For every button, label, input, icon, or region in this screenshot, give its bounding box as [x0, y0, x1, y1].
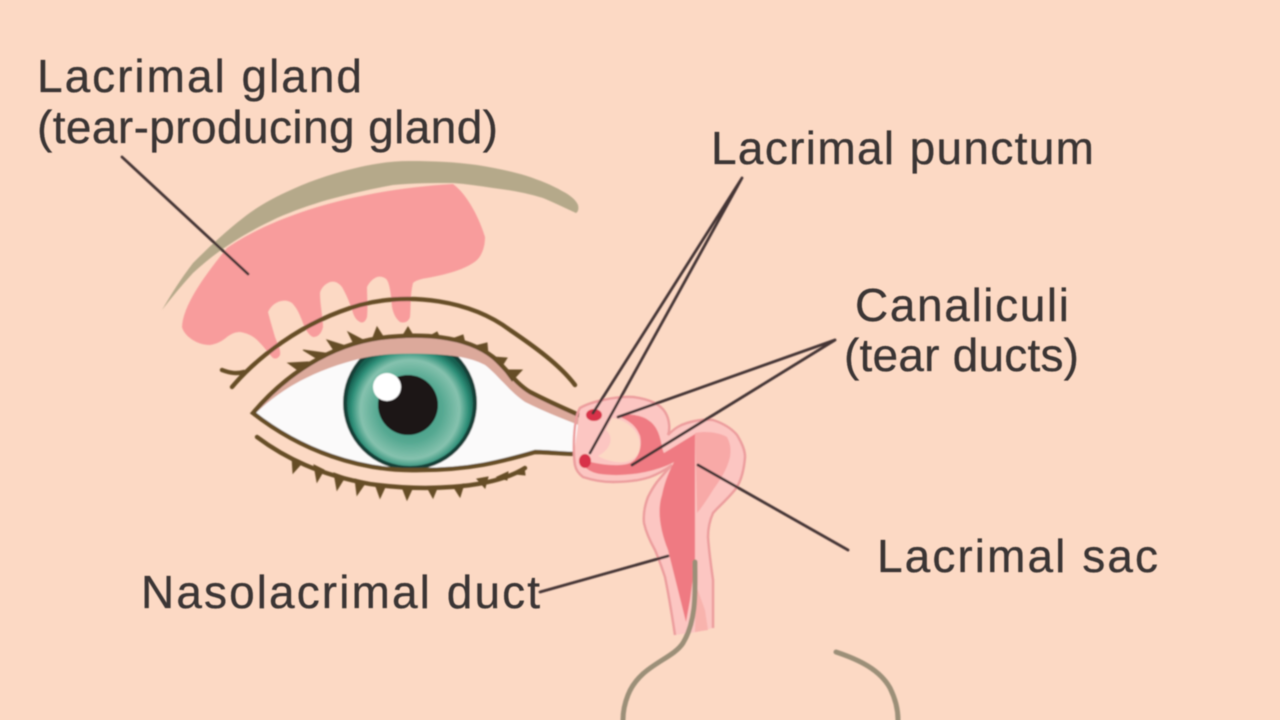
- caruncle: [590, 431, 611, 454]
- upper eyelid crease: [222, 299, 575, 387]
- eye outline: [253, 336, 612, 470]
- lacrimal gland: [182, 184, 485, 359]
- lower eyelashes: [292, 457, 525, 500]
- inner corner area: [598, 418, 640, 462]
- diagram: eye and tear system: [122, 157, 898, 720]
- highlight: [373, 373, 401, 401]
- leader lines: [122, 157, 848, 592]
- lower eyelid crease: [257, 437, 525, 488]
- iris: [345, 338, 475, 468]
- duct wall outline: [574, 397, 745, 635]
- label: nasolacrimal duct: Nasolacrimal duct: [141, 566, 540, 618]
- labels: [37, 50, 1158, 618]
- label: lacrimal punctum: Lacrimal punctum: [711, 122, 1094, 174]
- nose outline: [623, 562, 898, 720]
- lacrimal sac light side: [695, 432, 731, 513]
- label: lacrimal sac: Lacrimal sac: [877, 530, 1158, 582]
- lacrimal sac and duct wall fill: [573, 397, 745, 635]
- pupil: [378, 375, 438, 435]
- upper lid band: [256, 336, 597, 431]
- upper eyelashes: [288, 327, 522, 381]
- label: lacrimal gland: Lacrimal gland: [37, 50, 362, 102]
- label: tear ducts: (tear ducts): [844, 329, 1079, 381]
- lower duct light side: [695, 585, 708, 632]
- label: tear-producing gland: (tear-producing gland): [37, 101, 498, 153]
- canaliculi and sac inner: [583, 415, 695, 622]
- eye white: [253, 336, 612, 470]
- lacrimal puncta: [579, 409, 602, 468]
- label: canaliculi: Canaliculi: [855, 279, 1069, 331]
- eyebrow: [162, 161, 578, 310]
